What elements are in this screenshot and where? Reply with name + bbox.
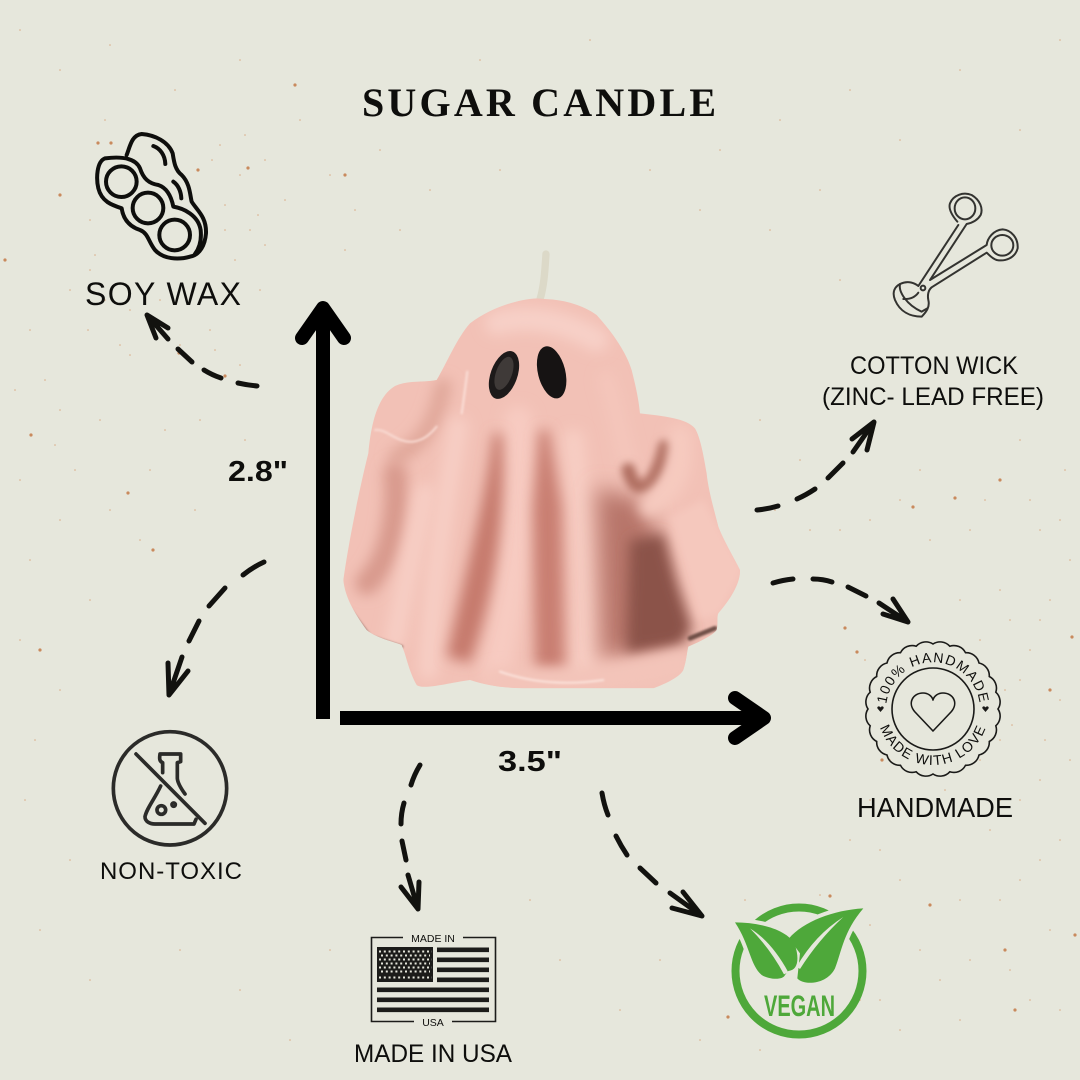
label: cotton wick: [822, 352, 1044, 411]
icon: made in USA flag: MADE IN: [411, 933, 455, 945]
icon: handmade badge: MADE WITH LOVE: [880, 724, 986, 765]
icon: wick trimmer: [894, 194, 1018, 317]
icon: handmade badge: 100% HANDMADE: [878, 652, 989, 703]
lit arm and flap: [628, 437, 681, 507]
icon: soy wax beans: [97, 134, 206, 258]
shaded right panel: [597, 487, 683, 660]
icon: made in USA flag: [372, 933, 496, 1029]
label: made in usa: MADE IN USA: [354, 1040, 512, 1068]
width arrow: [340, 698, 764, 738]
label: cotton wick: (ZINC- LEAD FREE): [822, 383, 1044, 411]
deepest shadow under flap: [627, 533, 692, 653]
icon: made in USA flag: USA: [422, 1017, 444, 1029]
label: handmade: HANDMADE: [857, 792, 1013, 823]
icon: vegan badge: VEGAN: [764, 990, 835, 1023]
label: soy wax: SOY WAX: [85, 276, 241, 312]
width dimension: 3.5": [498, 746, 562, 778]
label: non-toxic: NON-TOXIC: [100, 858, 242, 885]
dashed arrow to handmade: [773, 579, 908, 622]
dashed arrow to made in usa: [401, 765, 420, 909]
dark fold left of centre: [447, 433, 503, 663]
height dimension: 2.8": [228, 456, 288, 488]
icon: non-toxic flask: [113, 732, 227, 845]
label: cotton wick: COTTON WICK: [850, 352, 1018, 380]
candle wick: [540, 254, 546, 299]
ghost candle: [330, 254, 750, 700]
ghost left eye: [483, 347, 525, 403]
dashed arrow to vegan: [602, 793, 702, 916]
dark fold at centre: [533, 430, 565, 670]
dashed arrow to cotton wick: [757, 422, 874, 510]
icon: vegan badge: [735, 908, 863, 1034]
dashed arrow to non-toxic: [168, 562, 264, 695]
icon: handmade badge: [865, 641, 1001, 777]
ghost right eye: [532, 343, 571, 401]
ghost body: [344, 298, 740, 688]
soft fold shading: [367, 319, 633, 670]
dashed arrow to soy wax: [147, 315, 257, 386]
height arrow: [302, 308, 344, 719]
title: SUGAR CANDLE: [362, 80, 716, 125]
